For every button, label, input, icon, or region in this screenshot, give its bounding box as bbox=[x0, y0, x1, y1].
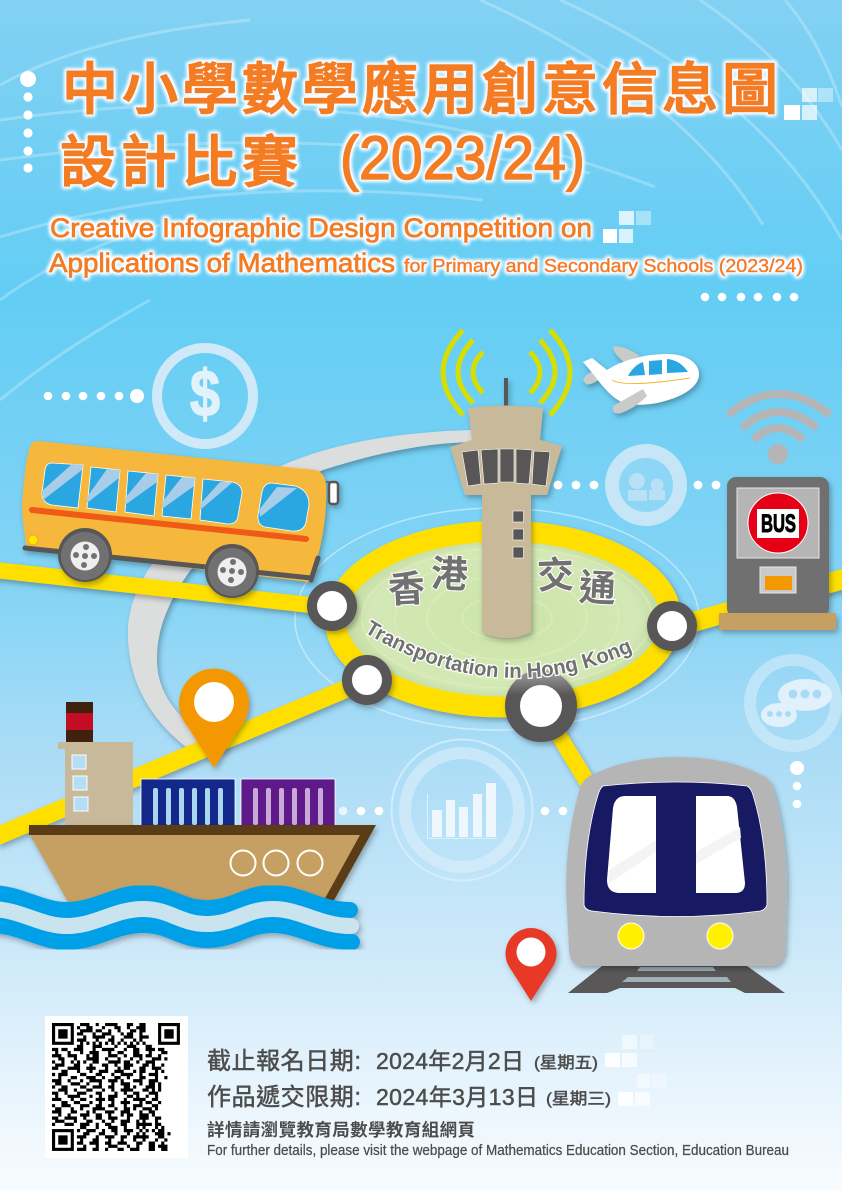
label: Hong Kong transport Chinese bbox=[387, 553, 617, 611]
decorative dots: title left bbox=[20, 71, 36, 173]
deadline: registration bbox=[207, 1048, 598, 1075]
train headlights bbox=[618, 923, 733, 949]
ship funnel bbox=[66, 702, 93, 742]
label: Transportation in Hong Kong: Transportation in Hong Kong bbox=[366, 618, 634, 680]
orange map pin bbox=[179, 669, 249, 768]
control tower signal waves bbox=[443, 330, 570, 415]
bus stop bbox=[719, 477, 836, 630]
label: Hong Kong transport Chinese: 交 bbox=[536, 554, 575, 597]
label: Hong Kong transport Chinese: 通 bbox=[578, 567, 617, 610]
icon: dollar circle: $ bbox=[190, 356, 220, 430]
title: Chinese: 設計比賽 bbox=[60, 131, 298, 194]
label: Hong Kong transport Chinese: 香 bbox=[387, 568, 426, 611]
deadline: submission bbox=[207, 1084, 611, 1111]
decorative dots: subtitle right bbox=[701, 293, 798, 301]
title: English bbox=[49, 213, 803, 278]
decorative squares: subtitle bbox=[603, 211, 651, 243]
decorative squares: title right bbox=[784, 88, 833, 120]
further details: 詳情請瀏覽教育局數學教育組網頁 bbox=[207, 1120, 475, 1140]
label: Hong Kong transport Chinese: 港 bbox=[430, 553, 469, 596]
sea waves bbox=[0, 893, 352, 942]
dotted connector: chart bbox=[339, 807, 567, 815]
grey flight path bbox=[128, 430, 472, 750]
decorative squares: footer bbox=[605, 1035, 667, 1106]
dotted connector: chat bbox=[790, 761, 804, 808]
deadline: registration: 2024年2月2日 bbox=[376, 1048, 524, 1074]
cargo ship bbox=[29, 702, 376, 902]
bus wheels bbox=[58, 528, 259, 598]
QR code bbox=[45, 1016, 188, 1158]
ship cabin bbox=[58, 742, 133, 825]
purple container bbox=[241, 779, 335, 826]
further details: For further details, please visit the webpage of Mathematics Education Section, Education Bureau bbox=[207, 1143, 789, 1159]
deadline: registration: 截止報名日期: bbox=[207, 1048, 361, 1075]
blue container bbox=[141, 779, 235, 826]
title: Chinese bbox=[60, 58, 778, 194]
background curved lines bbox=[0, 0, 842, 400]
icon: wifi bbox=[728, 394, 830, 464]
bus stop sign: BUS bbox=[761, 510, 796, 538]
radar rings around interchange bbox=[295, 508, 699, 730]
bus bbox=[22, 441, 338, 598]
icon: bar chart circle bbox=[392, 740, 532, 880]
train tracks bbox=[568, 966, 785, 993]
central roundabout bbox=[335, 531, 671, 707]
icon: aeroplane bbox=[583, 346, 699, 413]
title: English: Applications of Mathematics bbox=[49, 248, 395, 278]
train windows bbox=[607, 796, 745, 893]
train front bbox=[584, 782, 767, 916]
icon: dollar circle bbox=[157, 348, 253, 444]
title: Chinese: (2023/24) bbox=[340, 124, 585, 192]
deadline: submission: (星期三) bbox=[546, 1090, 611, 1108]
title: English: for Primary and Secondary Schools (2023/24) bbox=[404, 255, 803, 276]
deadline: submission: 作品遞交限期: bbox=[207, 1084, 361, 1111]
bus stop sign bbox=[737, 488, 819, 558]
title: Chinese: 中小學數學應用創意信息圖 bbox=[62, 58, 778, 121]
deadline: submission: 2024年3月13日 bbox=[376, 1084, 538, 1110]
dotted connector: people bbox=[554, 481, 720, 489]
station nodes bbox=[312, 586, 692, 734]
icon: chat circle bbox=[750, 660, 836, 746]
further details bbox=[207, 1120, 789, 1159]
dotted connector: dollar bbox=[44, 389, 144, 403]
ship hull bbox=[29, 825, 376, 902]
train body bbox=[566, 757, 787, 966]
title: English: Creative Infographic Design Competition on bbox=[50, 213, 592, 243]
icon: people circle bbox=[612, 451, 680, 519]
yellow transport lines bbox=[0, 570, 842, 837]
control tower bbox=[450, 378, 562, 638]
MTR train bbox=[566, 757, 787, 993]
red map pin bbox=[506, 928, 556, 1001]
deadline: registration: (星期五) bbox=[534, 1054, 598, 1072]
